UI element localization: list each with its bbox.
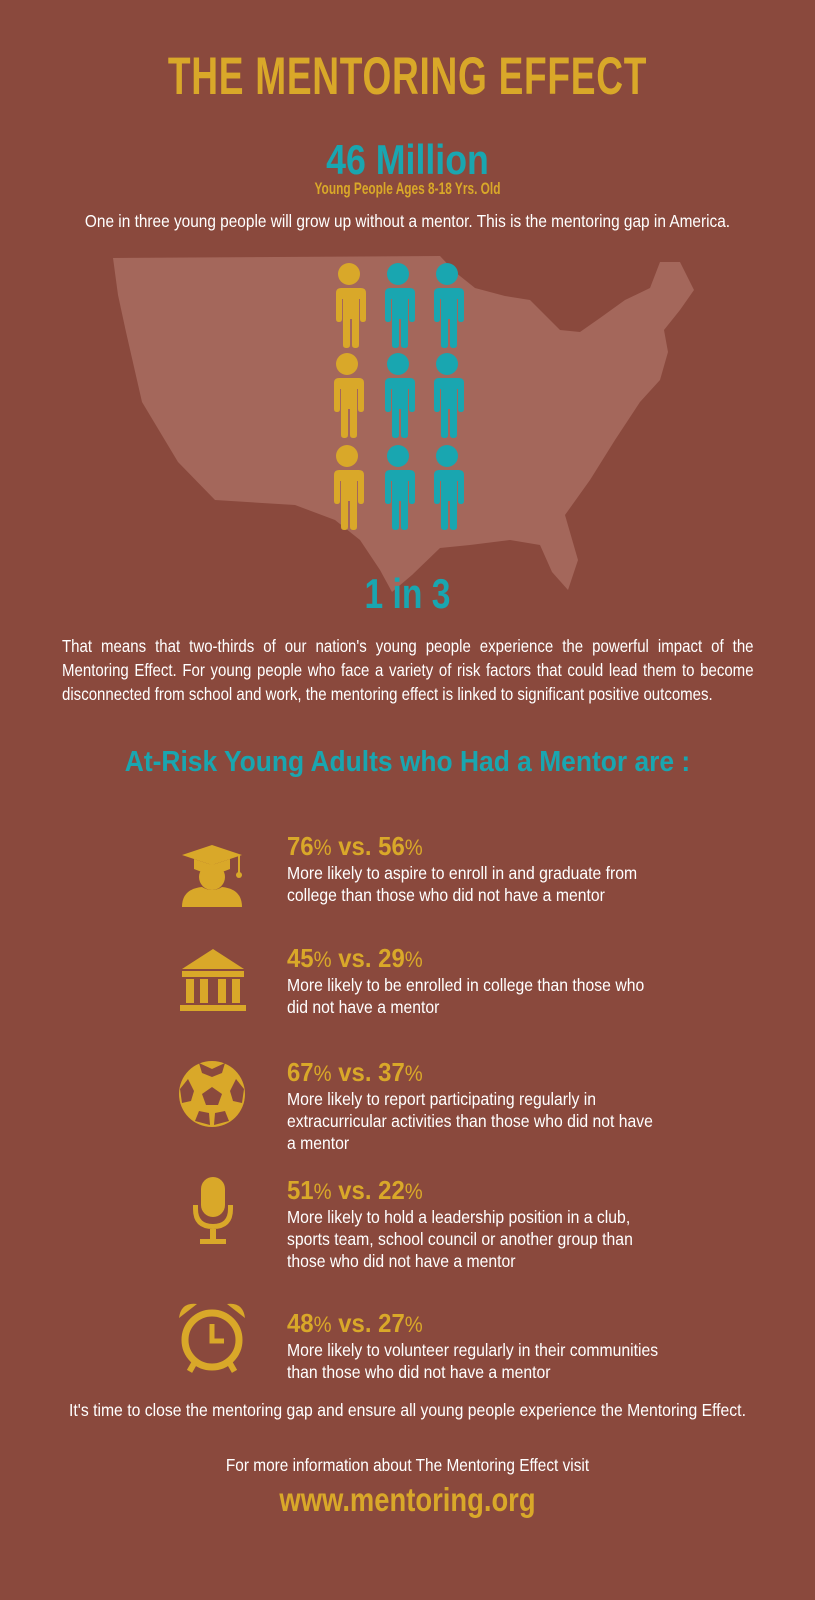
item 2: 45% vs. 29% bbox=[287, 943, 423, 973]
item 1: 76% vs. 56% bbox=[287, 831, 423, 861]
item 4: More likely to hold a leadership position in a club, sports team, school council or another group than those who did not have a mentor bbox=[287, 1207, 633, 1271]
item 4: 51% vs. 22% bbox=[287, 1175, 423, 1205]
more info: For more information about The Mentoring Effect visit bbox=[226, 1455, 589, 1475]
url: www.mentoring.org bbox=[279, 1481, 536, 1518]
closing text: It's time to close the mentoring gap and ensure all young people experience the Mentoring Effect. bbox=[69, 1400, 746, 1420]
item 2 bbox=[180, 943, 644, 1017]
item 5 bbox=[179, 1304, 658, 1382]
title: THE MENTORING EFFECT bbox=[168, 47, 647, 106]
intro text: One in three young people will grow up without a mentor. This is the mentoring gap in America. bbox=[85, 211, 730, 231]
us map bbox=[113, 256, 694, 592]
item 5: 48% vs. 27% bbox=[287, 1308, 423, 1338]
item 4 bbox=[193, 1175, 633, 1271]
item 2: More likely to be enrolled in college than those who did not have a mentor bbox=[287, 975, 644, 1017]
section heading: At-Risk Young Adults who Had a Mentor are : bbox=[125, 746, 690, 778]
icon: alarm clock bbox=[179, 1304, 245, 1373]
item 1 bbox=[182, 831, 637, 907]
headline number: 46 Million bbox=[326, 136, 489, 183]
item 1: More likely to aspire to enroll in and graduate from college than those who did not have a mentor bbox=[287, 863, 637, 905]
icon: building bbox=[180, 949, 246, 1011]
item 3 bbox=[179, 1057, 653, 1153]
item 3: 67% vs. 37% bbox=[287, 1057, 423, 1087]
icon: microphone bbox=[193, 1177, 233, 1244]
icon: graduate bbox=[182, 845, 242, 907]
item 3: More likely to report participating regularly in extracurricular activities than those who did not have a mentor bbox=[287, 1089, 653, 1153]
1 in 3: 1 in 3 bbox=[365, 570, 450, 617]
subtitle: Young People Ages 8-18 Yrs. Old bbox=[315, 180, 500, 198]
figures bbox=[0, 0, 17, 43]
icon: soccer ball bbox=[179, 1061, 245, 1127]
map with figures bbox=[113, 256, 694, 592]
item 5: More likely to volunteer regularly in their communities than those who did not have a mentor bbox=[287, 1340, 658, 1382]
paragraph: That means that two-thirds of our nation's young people experience the powerful impact of the Mentoring Effect. For young people who face a variety of risk factors that could lead them to become disconnected from school and work, the mentoring effect is linked to significant positive outcomes. bbox=[62, 636, 754, 704]
